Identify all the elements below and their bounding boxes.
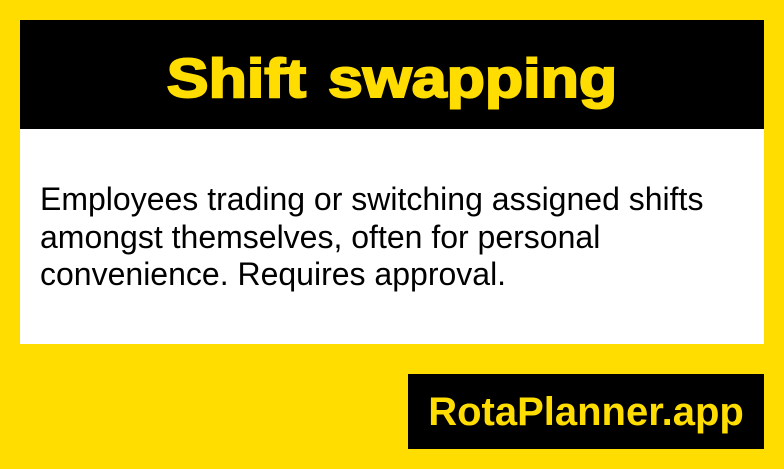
title: Shift swapping — [167, 47, 617, 109]
panel: definition — [20, 129, 764, 344]
brand name: RotaPlanner.app — [428, 390, 744, 434]
panel: title header — [20, 20, 764, 129]
panel: brand badge — [408, 374, 764, 449]
text block: definition: convenience. Requires approval. — [40, 256, 506, 292]
text block: definition — [40, 181, 703, 292]
text block: definition: Employees trading or switching assigned shifts — [40, 181, 703, 217]
text block: definition: amongst themselves, often for personal — [40, 218, 600, 254]
